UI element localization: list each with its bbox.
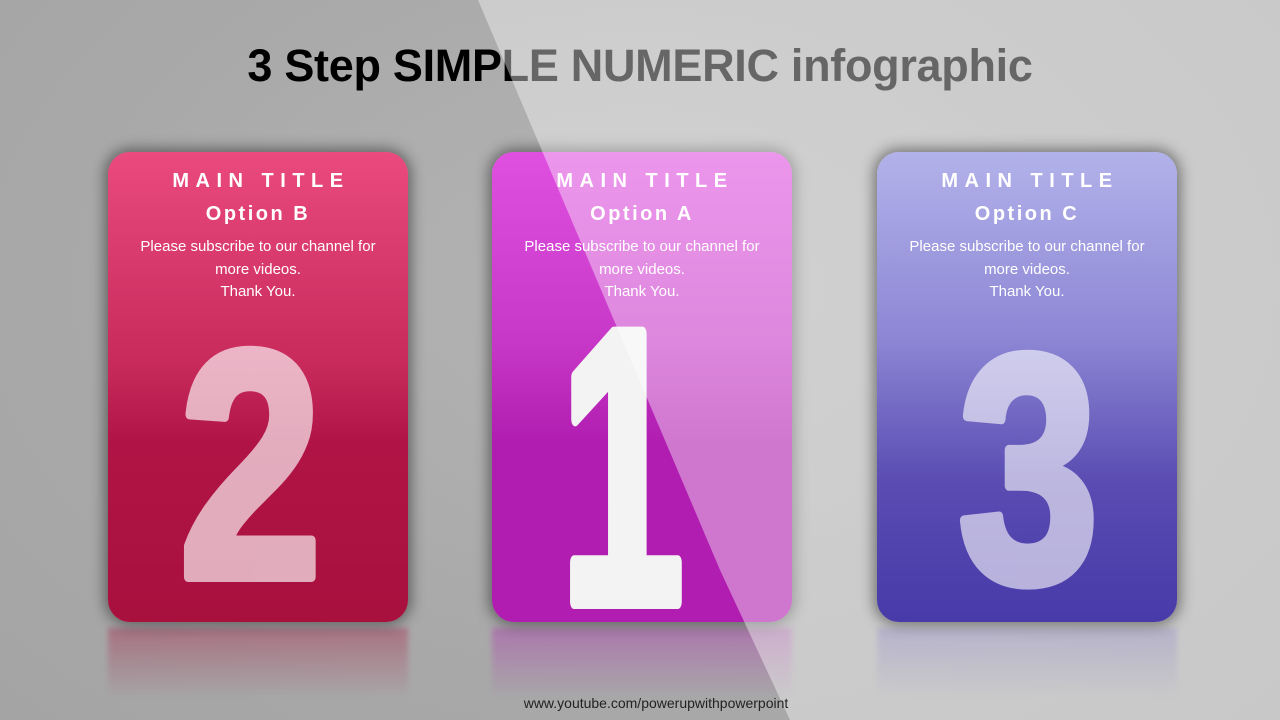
heading: MAIN TITLE: [941, 170, 1119, 192]
panel: option A: [492, 152, 792, 622]
body text: more videos.: [599, 260, 685, 278]
title: 3 Step SIMPLE NUMERIC infographic: [247, 40, 1033, 91]
subheading: Option A: [590, 203, 694, 225]
panel: option C: [877, 152, 1177, 622]
body text: [140, 238, 376, 300]
body text: Please subscribe to our channel for: [524, 238, 760, 255]
body text: more videos.: [215, 260, 301, 278]
body text: Thank You.: [604, 283, 680, 300]
body text: [909, 238, 1145, 300]
subheading: Option B: [206, 203, 310, 225]
reflections: [106, 625, 1178, 687]
body text: Please subscribe to our channel for: [909, 238, 1145, 255]
body text: Please subscribe to our channel for: [140, 238, 376, 255]
body text: Thank You.: [220, 283, 296, 300]
heading: MAIN TITLE: [172, 170, 350, 192]
subheading: Option C: [975, 203, 1079, 225]
heading: MAIN TITLE: [556, 170, 734, 192]
body text: more videos.: [984, 260, 1070, 278]
body text: [524, 238, 760, 300]
body text: Thank You.: [989, 283, 1065, 300]
footer url: www.youtube.com/powerupwithpowerpoint: [524, 695, 788, 711]
panel: option B: [108, 152, 408, 622]
